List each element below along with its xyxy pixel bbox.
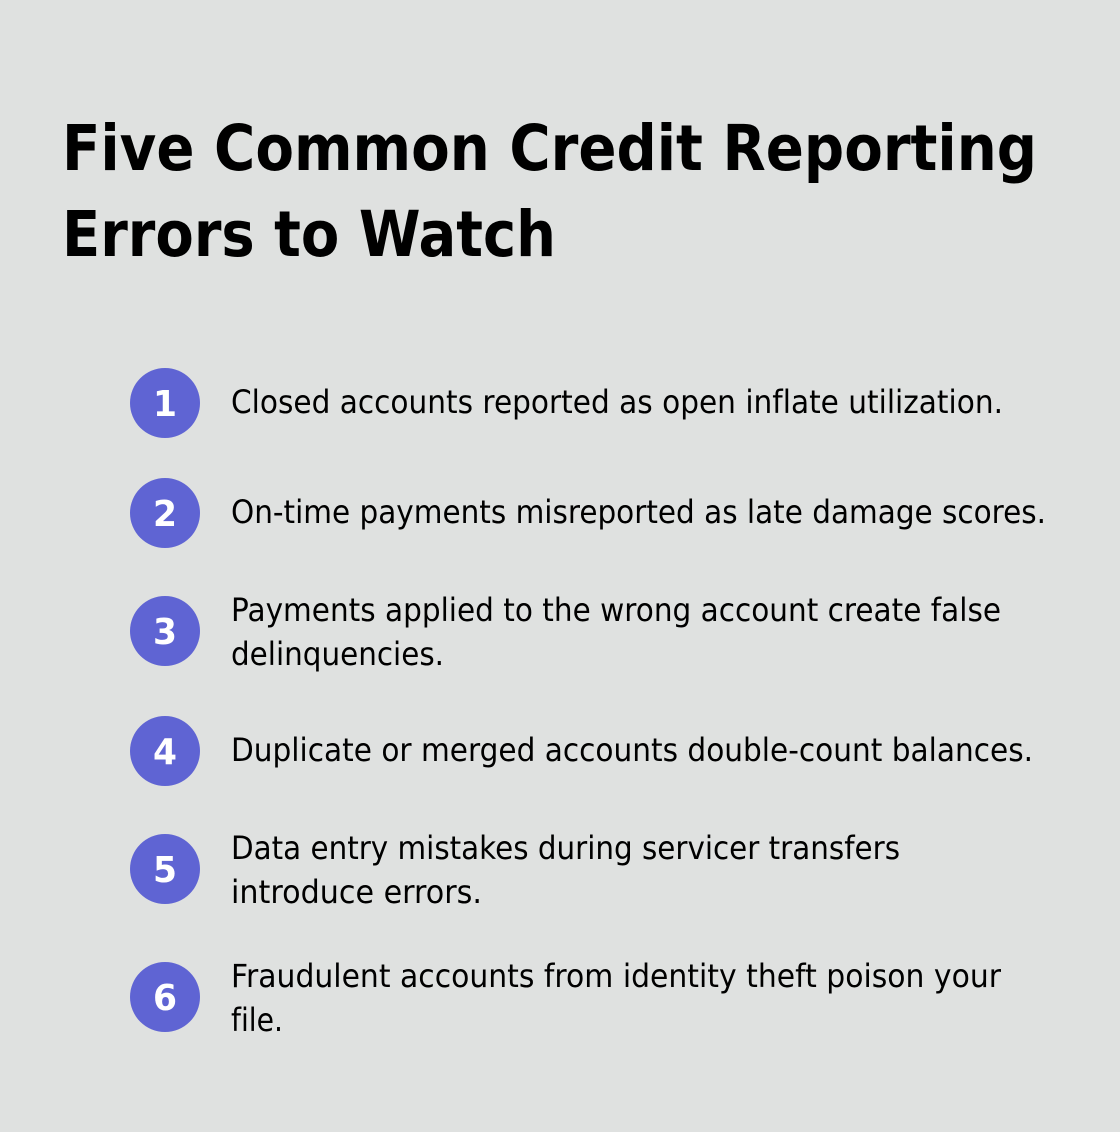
item text 6: Fraudulent accounts from identity theft poison your [231, 957, 1002, 995]
title [62, 112, 1037, 271]
list item 4 [130, 716, 1033, 786]
number badge 1: 1 [153, 384, 177, 425]
list item 5 [130, 829, 900, 911]
item text 1: Closed accounts reported as open inflate utilization. [231, 383, 1003, 421]
item text 6 [231, 957, 1002, 1039]
list item 2 [130, 478, 1046, 548]
number badge 2: 2 [153, 494, 177, 535]
number badge 4 [130, 716, 200, 786]
number badge 6: 6 [153, 978, 177, 1019]
number badge 6 [130, 962, 200, 1032]
item text 3: Payments applied to the wrong account create false [231, 591, 1001, 629]
number badge 2 [130, 478, 200, 548]
list item 3 [130, 591, 1001, 673]
number badge 5: 5 [153, 850, 177, 891]
number badge 1 [130, 368, 200, 438]
item text 3 [231, 591, 1001, 673]
number badge 3 [130, 596, 200, 666]
item text 4: Duplicate or merged accounts double-count balances. [231, 731, 1033, 769]
item text 3: delinquencies. [231, 635, 444, 673]
item text 6: file. [231, 1001, 283, 1039]
item text 5 [231, 829, 900, 911]
number badge 4: 4 [153, 732, 177, 773]
number badge 3: 3 [153, 612, 177, 653]
title: Errors to Watch [62, 198, 556, 271]
list item 1 [130, 368, 1003, 438]
item text 2: On-time payments misreported as late damage scores. [231, 493, 1046, 531]
list item 6 [130, 957, 1002, 1039]
number badge 5 [130, 834, 200, 904]
item text 5: Data entry mistakes during servicer transfers [231, 829, 900, 867]
item text 5: introduce errors. [231, 873, 482, 911]
